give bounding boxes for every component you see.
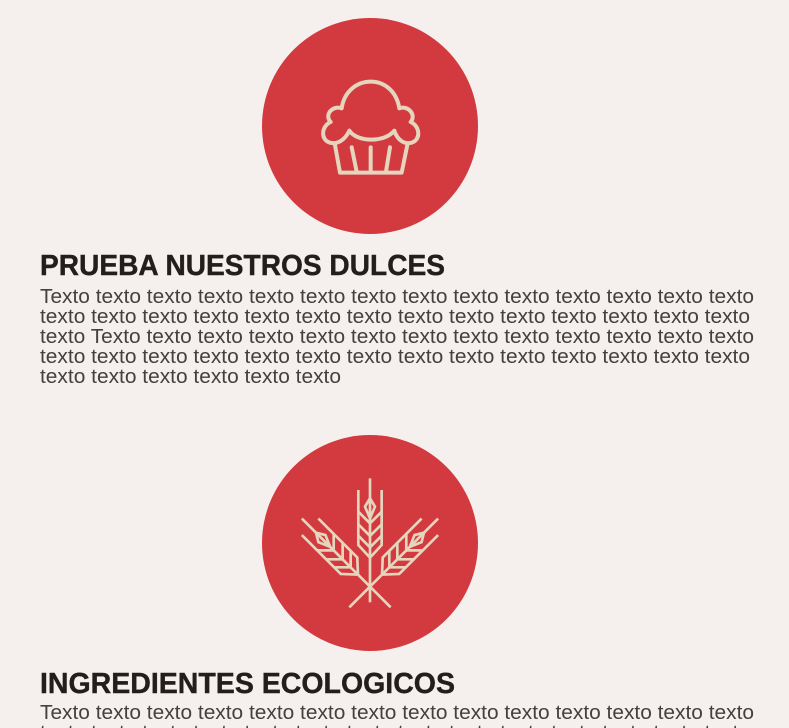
text block: dulces description	[40, 286, 754, 388]
text block: ingredientes description: Texto texto texto texto texto texto texto texto texto texto texto texto texto texto	[40, 702, 754, 724]
icon: wheat in red circle	[262, 435, 478, 651]
text block: dulces description: texto texto texto texto texto texto texto texto texto texto texto texto texto texto	[40, 346, 750, 368]
section: ingredientes ecologicos	[40, 435, 754, 728]
heading: ingredientes ecologicos: INGREDIENTES ECOLOGICOS	[40, 668, 455, 700]
text block: dulces description: Texto texto texto texto texto texto texto texto texto texto texto texto texto texto	[40, 286, 754, 308]
icon: cupcake in red circle	[262, 18, 478, 234]
text block: dulces description: texto Texto texto texto texto texto texto texto texto texto texto texto texto texto	[40, 326, 754, 348]
section: prueba nuestros dulces	[40, 18, 754, 388]
text block: dulces description: texto texto texto texto texto texto	[40, 366, 341, 388]
heading: prueba nuestros dulces: PRUEBA NUESTROS DULCES	[40, 250, 445, 282]
text block: dulces description: texto texto texto texto texto texto texto texto texto texto texto texto texto texto	[40, 306, 750, 328]
